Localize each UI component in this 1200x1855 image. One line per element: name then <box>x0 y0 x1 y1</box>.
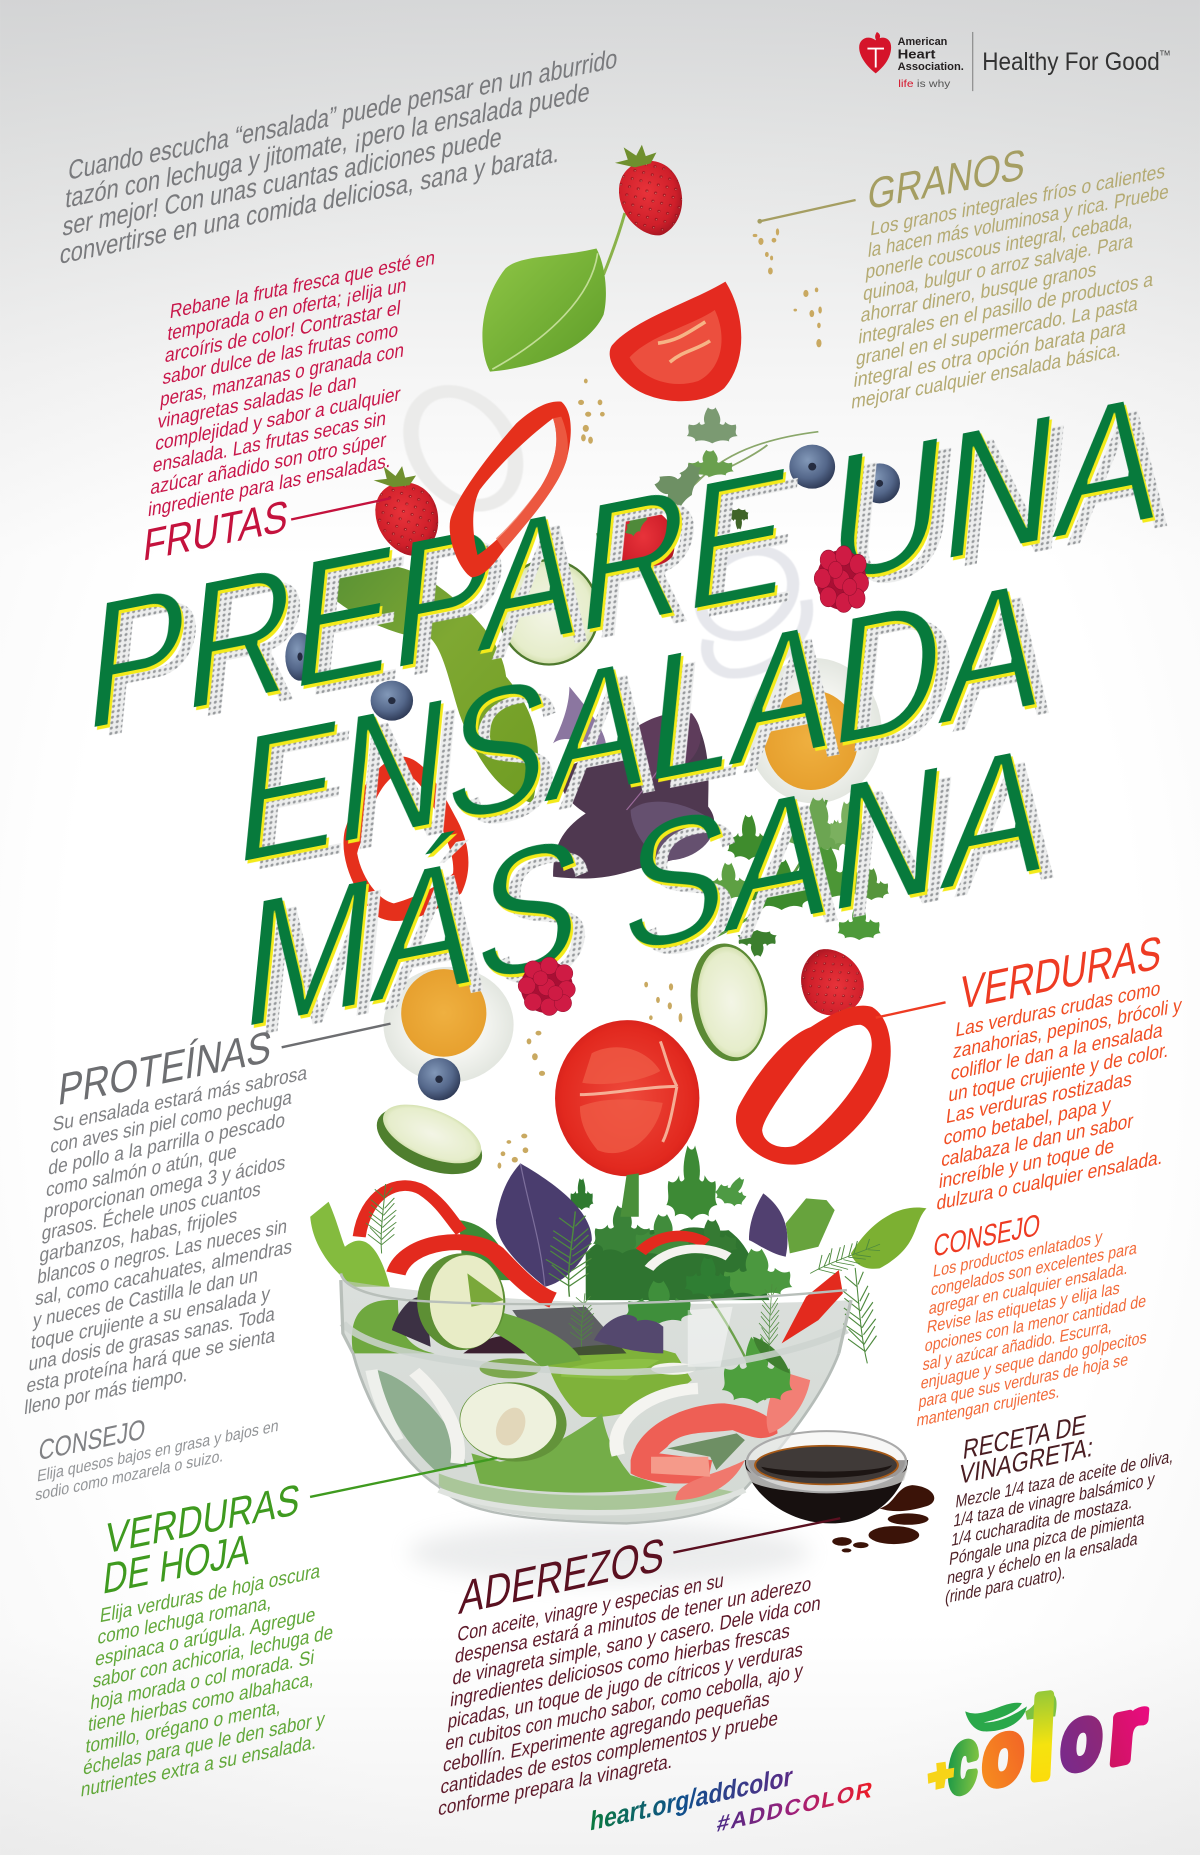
body: aderezos: ingredientes deliciosos como hierbas frescas <box>449 1620 791 1712</box>
organization name: Heart <box>898 47 936 62</box>
title line 3: MÁS SANA <box>248 711 1073 1078</box>
glass bowl body <box>341 1280 851 1523</box>
body: verduras: como betabel, papa y <box>943 1094 1112 1150</box>
heading: aderezos: ADEREZOS <box>457 1529 667 1625</box>
leader line: granos <box>757 200 856 224</box>
tip: verduras consejo: agregar en cualquier ensalada. <box>928 1258 1129 1318</box>
icon: heart and torch <box>859 32 891 73</box>
organization name: Association. <box>898 61 964 73</box>
tip: verduras consejo: opciones con la menor cantidad de <box>924 1290 1147 1356</box>
grains <box>578 228 822 444</box>
body: frutas: peras, manzanas o granada con <box>159 340 405 411</box>
tip: proteinas consejo: CONSEJO <box>37 1414 147 1467</box>
body: proteinas: y nueces de Castilla le dan un <box>32 1264 259 1332</box>
body: verduras: un toque crujiente y de color. <box>947 1040 1170 1107</box>
body: granos: ponerle couscous integral, cebada, <box>865 209 1134 284</box>
tip: verduras consejo: sal y azúcar añadido. Escurra, <box>922 1316 1113 1374</box>
heading: proteinas: PROTEÍNAS <box>56 1021 274 1115</box>
body: proteinas: grasos. Échele unos cuantos <box>41 1178 262 1245</box>
body: frutas <box>147 247 436 521</box>
body: verduras de hoja: tomillo, orégano o menta, <box>85 1696 282 1758</box>
intro paragraph <box>58 43 619 270</box>
body: verduras de hoja: nutrientes extra a su ensalada. <box>80 1732 318 1802</box>
body: receta <box>944 1446 1174 1607</box>
body: aderezos: Con aceite, vinagre y especias en su <box>456 1570 725 1646</box>
intro paragraph: convertirse en una comida deliciosa, sana y barata. <box>58 137 561 270</box>
tip: verduras consejo: CONSEJO <box>932 1207 1042 1264</box>
body: frutas: sabor dulce de las frutas como <box>161 319 399 389</box>
body: verduras de hoja: tiene hierbas como albahaca, <box>87 1668 315 1736</box>
leader line: verduras de hoja <box>310 1458 497 1497</box>
vinaigrette drips <box>832 1485 934 1552</box>
letters: o <box>1058 1684 1106 1791</box>
section: aderezos <box>437 1518 840 1820</box>
glass rim highlights <box>341 1273 851 1523</box>
section: proteinas <box>23 1021 391 1504</box>
intro paragraph: tazón con lechuga y jitomate, ¡pero la ensalada puede <box>64 76 591 214</box>
tip: verduras consejo: Los productos enlatados y <box>932 1226 1104 1281</box>
body: granos: mejorar cualquier ensalada básica. <box>850 339 1122 414</box>
body: aderezos: despensa estará a minutos de tener un aderezo <box>454 1573 812 1668</box>
letters <box>945 1676 1149 1813</box>
icon: onion ring 1 <box>391 379 535 518</box>
foods in front of title <box>450 401 869 1016</box>
logo: American Heart Association: TM <box>1160 50 1170 58</box>
leader line: aderezos <box>673 1518 840 1553</box>
body: frutas: azúcar añadido son otro súper <box>149 429 387 499</box>
body: aderezos: picadas, un toque de jugo de cítricos y verduras <box>447 1639 804 1733</box>
icon: strawberry lower <box>790 939 879 1040</box>
icon: cucumber vertical slice <box>683 938 775 1066</box>
lower salad in glass <box>352 1297 741 1510</box>
tip: proteinas consejo: Elija quesos bajos en grasa y bajos en <box>36 1416 280 1486</box>
title line 3: MÁS SANA <box>236 705 1061 1072</box>
icon: red pepper ring 1 <box>450 401 571 577</box>
body: aderezos: cebollín. Experimente agregando pequeñas <box>442 1688 771 1777</box>
title line 3: MÁS SANA <box>234 702 1059 1069</box>
red pepper pale in bowl <box>631 1370 810 1500</box>
body: proteinas <box>23 1062 311 1419</box>
intro paragraph: Cuando escucha “ensalada” puede pensar en un aburrido <box>67 43 619 186</box>
icon: raspberry lower <box>518 957 575 1016</box>
body: proteinas: lleno por más tiempo. <box>23 1364 189 1419</box>
food: falling ingredients (upper) <box>482 136 822 444</box>
body: proteinas: toque crujiente a su ensalada y <box>30 1283 272 1354</box>
healthy for good: Healthy For Good <box>982 49 1160 76</box>
icon: parsley sprig <box>592 407 818 548</box>
logo: American Heart Association <box>859 32 1170 91</box>
tip: proteinas consejo: sodio como mozarela o suizo. <box>34 1446 224 1504</box>
body: proteinas: blancos o negros. Las nueces sin <box>36 1216 288 1289</box>
letters: c <box>945 1708 982 1813</box>
body: frutas: vinagretas saladas le dan <box>157 371 358 433</box>
letters: r <box>1106 1677 1149 1783</box>
heading: verduras de hoja: DE HOJA <box>101 1525 253 1604</box>
icon: egg top <box>747 658 882 803</box>
title line 1: PREPARE <box>92 434 812 780</box>
body: granos: ahorrar dinero, busque granos <box>860 259 1098 327</box>
icon: blueberry trio <box>285 445 900 721</box>
icon: tomato wedge <box>610 282 741 401</box>
body: verduras: calabaza le dan un sabor <box>940 1110 1134 1172</box>
heading: granos: GRANOS <box>865 140 1028 219</box>
cucumber in bowl <box>449 1373 578 1471</box>
icon: purple basil <box>553 687 716 879</box>
body: verduras de hoja: espinaca o arúgula. Agregue <box>94 1604 317 1671</box>
body: frutas: ensalada. Las frutas secas sin <box>152 408 387 477</box>
body: aderezos: de vinagreta simple, sano y casero. Dele vida con <box>451 1593 822 1690</box>
body: proteinas: como salmón o atún, que <box>45 1141 238 1202</box>
tip: verduras consejo: congelados son excelentes para <box>930 1238 1138 1300</box>
body: verduras de hoja: Elija verduras de hoja oscura <box>99 1560 322 1627</box>
body: granos: integrales en el pasillo de productos a <box>857 269 1155 349</box>
icon: strawberry top <box>608 136 691 243</box>
food: falling ingredients (behind title), zoomed coords <box>285 379 900 957</box>
icon: onion rings 2 <box>682 537 812 674</box>
heading: receta de vinagreta: VINAGRETA: <box>958 1431 1095 1490</box>
main title: Prepare una ensalada más sana <box>77 348 1188 1081</box>
body: proteinas: esta proteína hará que se sienta <box>25 1325 277 1398</box>
logo: +color <box>928 1676 1149 1813</box>
icon: blueberry lower <box>418 1058 460 1101</box>
leader line: frutas <box>291 498 391 520</box>
section: vinagreta recipe <box>944 1409 1174 1607</box>
grains lower <box>498 982 682 1169</box>
body: aderezos <box>437 1549 827 1820</box>
icon: parsley bottom sprig <box>707 797 889 957</box>
body: frutas: ingrediente para las ensaladas. <box>147 450 392 521</box>
body: verduras <box>935 973 1186 1215</box>
tagline: life is why <box>898 79 950 90</box>
heading: receta de vinagreta <box>958 1409 1095 1490</box>
icon: pepper ring 3 <box>736 1006 891 1165</box>
title line 1: PREPARE <box>78 425 798 771</box>
icon: cucumber slice top <box>498 559 600 666</box>
body: verduras: Las verduras crudas como <box>954 978 1162 1042</box>
section: granos <box>757 140 1172 414</box>
url: heart.org/addcolor: heart.org/addcolor <box>589 1760 794 1837</box>
top greens <box>310 1145 927 1300</box>
body: proteinas: Su ensalada estará más sabrosa <box>52 1062 309 1136</box>
body: verduras: increíble y un toque de <box>938 1136 1115 1193</box>
body: proteinas: proporcionan omega 3 y ácidos <box>43 1152 286 1223</box>
body: verduras de hoja <box>80 1556 343 1802</box>
food: falling ingredients (lower) <box>367 938 891 1188</box>
vinaigrette dish <box>745 1431 908 1523</box>
section: verduras de hoja <box>80 1458 497 1802</box>
title line 1: PREPARE <box>80 428 800 774</box>
body: proteinas: sal, como cacahuates, almendras <box>34 1236 293 1310</box>
body: frutas: Rebane la fruta fresca que esté en <box>169 247 436 323</box>
body: verduras: coliflor le dan a la ensalada <box>950 1020 1164 1085</box>
icon: strawberry 2 <box>367 461 444 559</box>
body: granos: integral es otra opción barata para <box>853 317 1128 392</box>
heading: receta de vinagreta: RECETA DE <box>961 1409 1088 1465</box>
reflection under bowl <box>408 1522 811 1583</box>
icon: raspberry top <box>814 546 869 613</box>
heading: verduras de hoja: VERDURAS <box>103 1476 302 1564</box>
body: granos <box>850 159 1172 414</box>
salad bowl <box>310 1145 934 1552</box>
body: frutas: arcoíris de color! Contrastar el <box>164 297 402 367</box>
icon: strawberry behind R <box>618 509 675 577</box>
letters: o <box>979 1699 1028 1806</box>
icon: pepper ring 2 <box>343 757 468 921</box>
organization name <box>898 36 964 73</box>
body: frutas: temporada o en oferta; ¡elija un <box>166 275 408 345</box>
leader line: verduras <box>876 1002 946 1018</box>
body: proteinas: garbanzos, habas, frijoles <box>39 1205 238 1267</box>
body: proteinas: una dosis de grasas sanas. Toda <box>28 1303 277 1376</box>
body: receta: (rinde para cuatro). <box>944 1562 1067 1607</box>
icon: cucumber lower left <box>367 1091 493 1188</box>
organization name: American <box>898 36 947 48</box>
body: granos: quinoa, bulgur o arroz salvaje. Para <box>862 230 1135 305</box>
icon: leaf <box>965 1693 1057 1731</box>
body: verduras de hoja: como lechuga romana, <box>96 1592 273 1649</box>
body: aderezos: en cubitos con mucho sabor, como cebolla, ajo y <box>444 1660 805 1755</box>
leader line: proteinas <box>282 1024 391 1047</box>
body: verduras: dulzura o cualquier ensalada. <box>935 1147 1164 1215</box>
purple basil in salad <box>496 1163 787 1287</box>
body: aderezos: conforme prepara la vinagreta. <box>437 1751 674 1820</box>
icon: plus sign <box>928 1762 954 1790</box>
icon: tomato slice <box>555 1020 699 1176</box>
body: verduras de hoja: échelas para que le den sabor y <box>82 1708 327 1780</box>
tip: verduras consejo: mantengan crujientes. <box>916 1381 1061 1430</box>
body: receta: Póngale una pizca de pimienta <box>948 1508 1146 1569</box>
body: receta: 1/4 cucharadita de mostaza. <box>950 1492 1134 1550</box>
hashtag: #ADDCOLOR: #ADDCOLOR <box>715 1776 875 1837</box>
tip: proteinas consejo <box>34 1414 280 1504</box>
stem of leaf <box>604 213 625 275</box>
letters: l <box>1028 1676 1057 1802</box>
body: verduras de hoja: sabor con achicoria, lechuga de <box>92 1622 334 1693</box>
section: verduras <box>876 927 1186 1430</box>
icon: basil leaf <box>482 249 606 372</box>
tip: verduras consejo: Revise las etiquetas y elija las <box>926 1278 1121 1337</box>
heading: frutas: FRUTAS <box>141 490 291 571</box>
tip: verduras consejo: enjuague y seque dando golpecitos <box>920 1327 1148 1393</box>
body: receta: negra y échelo en la ensalada <box>946 1529 1139 1588</box>
body: frutas: complejidad y sabor a cualquier <box>154 383 402 455</box>
red peppers and salad top <box>359 1184 885 1403</box>
body: proteinas: con aves sin piel como pechuga <box>49 1087 294 1158</box>
section: frutas <box>141 247 436 571</box>
intro paragraph: ser mejor! Con unas cuantas adiciones puede <box>61 121 503 242</box>
body: aderezos: cantidades de estos complementos y pruebe <box>440 1708 779 1799</box>
body: granos: granel en el supermercado. La pasta <box>855 293 1140 370</box>
body: verduras: Las verduras rostizadas <box>945 1068 1133 1128</box>
tip: verduras consejo: para que sus verduras de hoja se <box>918 1349 1129 1412</box>
heading: verduras de hoja <box>101 1476 302 1604</box>
body: verduras de hoja: hoja morada o col morada. Si <box>89 1647 315 1714</box>
icon: egg lower <box>383 967 514 1083</box>
body: proteinas: de pollo a la parrilla o pescado <box>47 1110 286 1180</box>
icon: romaine leaf <box>316 564 538 803</box>
tip: verduras consejo <box>916 1207 1161 1430</box>
body: receta: 1/4 taza de vinagre balsámico y <box>952 1469 1156 1531</box>
